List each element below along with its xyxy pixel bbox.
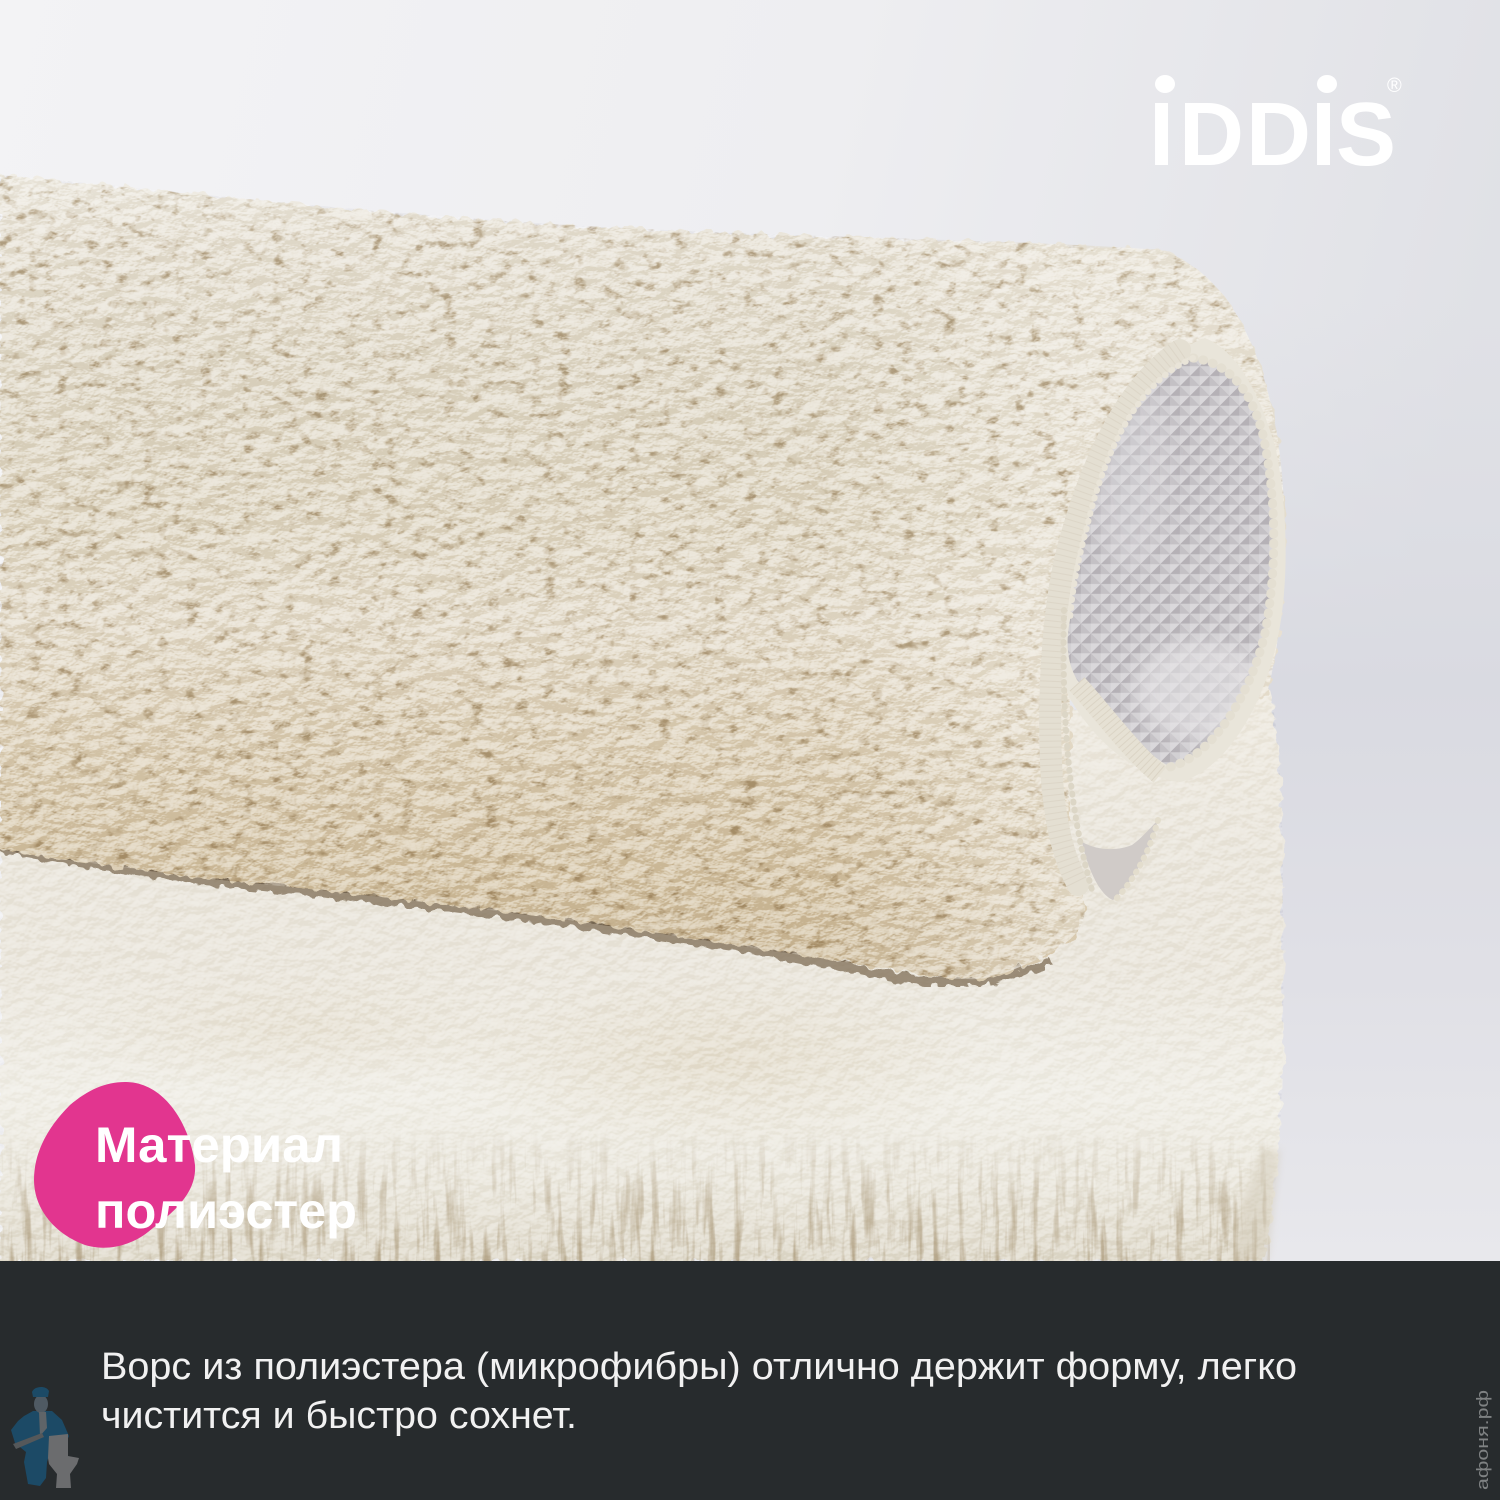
photo: shadow under the roll	[0, 848, 1050, 983]
brand logo: IDDIS: IDDIS	[1149, 85, 1396, 185]
heading: material: полиэстер	[95, 1183, 357, 1239]
photo: rolled rug	[0, 170, 1300, 995]
icon: plumber with toilet	[11, 1387, 79, 1488]
description text: чистится и быстро сохнет.	[101, 1395, 577, 1437]
pink blob	[34, 1082, 195, 1248]
heading: material: Материал	[95, 1117, 343, 1173]
heading: material	[95, 1117, 357, 1239]
description text	[101, 1346, 1297, 1437]
photo: lower rug layer	[0, 670, 1300, 1262]
brand logo: IDDIS: ®	[1387, 75, 1402, 97]
description text: Ворс из полиэстера (микрофибры) отлично держит форму, легко	[101, 1346, 1297, 1388]
photo: roll end with rubber backing	[1050, 338, 1286, 902]
dark footer band	[0, 1261, 1500, 1500]
vertical watermark: afonya.rf: афоня.рф	[1473, 1390, 1492, 1490]
